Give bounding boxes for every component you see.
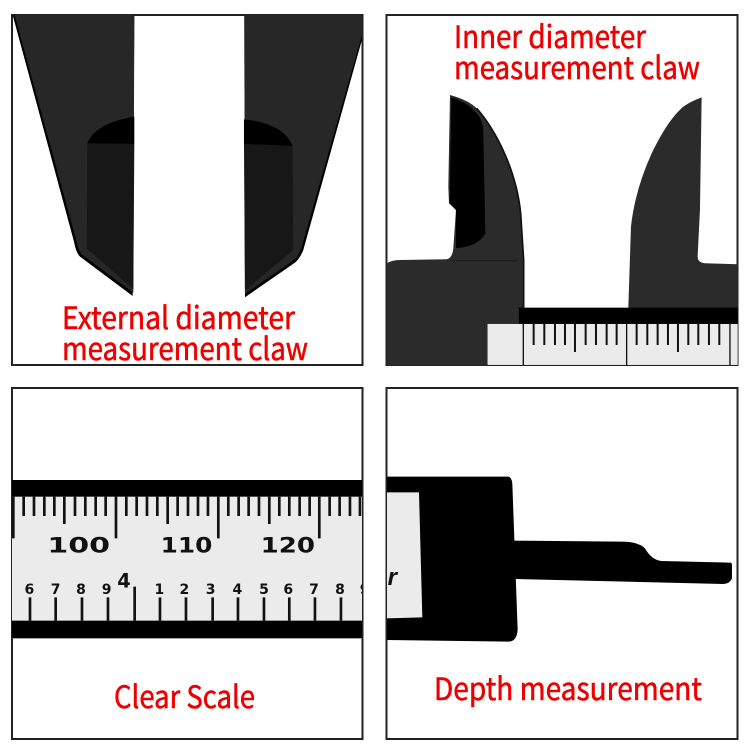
chart: ruler scale: 5 bbox=[259, 582, 269, 598]
chart: ruler scale: 8 bbox=[335, 582, 345, 598]
heading: inner diameter line 2: measurement claw bbox=[454, 43, 700, 88]
panel: external diameter claw bbox=[12, 15, 363, 369]
icon: caliper end with depth rod: r bbox=[388, 564, 399, 591]
chart: ruler scale: 4 bbox=[117, 569, 131, 592]
panel: depth measurement bbox=[386, 388, 738, 739]
icon: caliper end with depth rod bbox=[387, 477, 732, 642]
icon: right external jaw bbox=[244, 15, 363, 297]
chart: ruler scale: 7 bbox=[309, 582, 319, 598]
chart: ruler scale: 8 bbox=[76, 582, 86, 598]
heading: external diameter line 1: External diameter bbox=[62, 293, 296, 338]
chart: ruler scale: 2 bbox=[179, 582, 189, 598]
heading: inner diameter line 1: Inner diameter bbox=[454, 12, 647, 57]
heading: external diameter line 2: measurement claw bbox=[62, 324, 308, 369]
chart: ruler scale: 6 bbox=[24, 582, 34, 598]
chart: ruler scale: 120 bbox=[261, 533, 315, 558]
chart: ruler scale: 9 bbox=[360, 582, 369, 598]
panel: clear scale bbox=[11, 388, 369, 739]
panel: inner diameter claw bbox=[386, 12, 738, 365]
heading: depth measurement: Depth measurement bbox=[434, 664, 702, 709]
chart: ruler scale: 7 bbox=[51, 582, 61, 598]
chart: ruler scale bbox=[11, 480, 369, 639]
chart: ruler scale: 6 bbox=[283, 582, 293, 598]
chart: ruler scale: 110 bbox=[161, 533, 212, 558]
chart: ruler scale: 3 bbox=[206, 582, 216, 598]
icon: left external jaw bbox=[13, 15, 134, 296]
chart: ruler scale: 4 bbox=[232, 582, 242, 598]
icon: inner jaws and ruler bbox=[387, 95, 738, 365]
chart: ruler scale: 1 bbox=[154, 582, 164, 598]
chart: ruler scale: 100 bbox=[47, 533, 110, 558]
chart: ruler scale: 9 bbox=[102, 582, 112, 598]
heading: clear scale: Clear Scale bbox=[114, 672, 255, 717]
